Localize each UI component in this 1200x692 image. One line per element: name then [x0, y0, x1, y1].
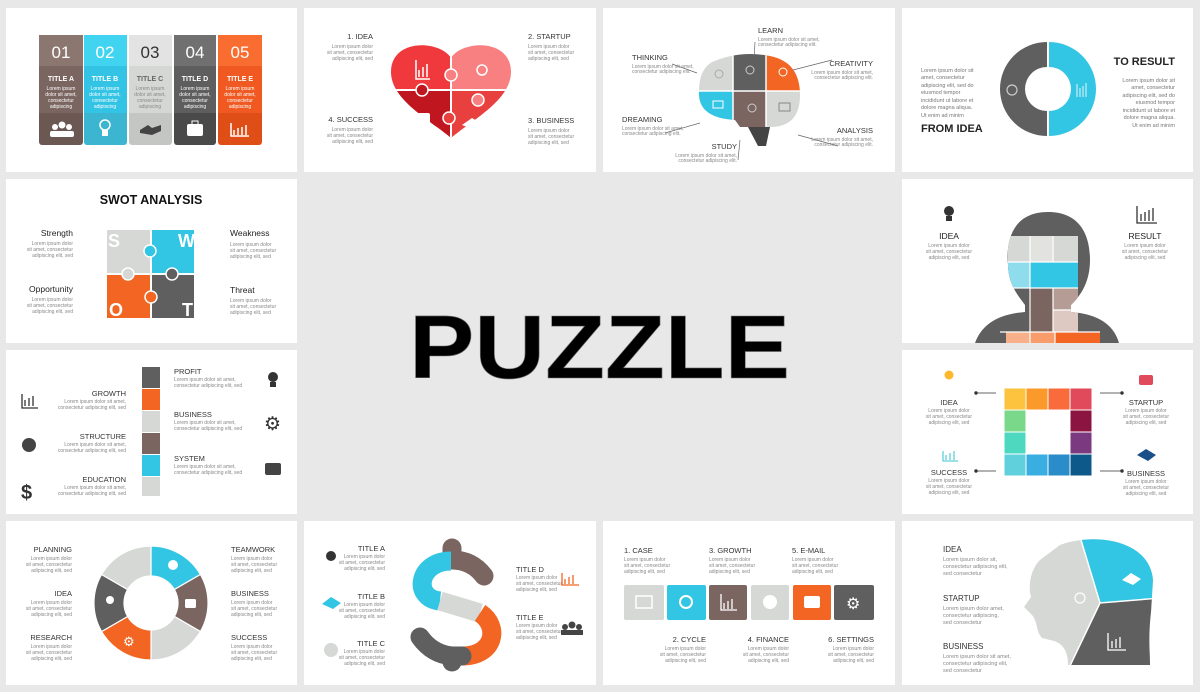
labels: left: TITLE C	[357, 639, 386, 648]
labels: sed consectetur	[943, 571, 982, 577]
label: 4. SUCCESS: sit amet, consectetur	[327, 133, 373, 139]
label: SUCCESS: sit amet, consectetur	[926, 484, 972, 490]
labels: left: adipiscing elit, sed	[31, 612, 72, 618]
column 01: TITLE A	[48, 76, 74, 83]
label: 3. BUSINESS: sit amet, consectetur	[528, 134, 574, 140]
label: Strength	[27, 228, 73, 259]
labels: sed consectetur	[943, 668, 982, 674]
label: SYSTEM: SYSTEM	[174, 454, 205, 463]
panel: SWOT analysis: O	[109, 300, 123, 320]
arrows	[975, 392, 1123, 472]
label: IDEA: sit amet, consectetur	[926, 249, 972, 255]
icons: left	[21, 394, 38, 504]
labels: top: adipiscing elit, sed	[709, 569, 750, 575]
labels: right: SUCCESS	[231, 633, 267, 642]
label: 4. SUCCESS: adipiscing elit, sed	[332, 139, 373, 145]
label: 2. STARTUP: sit amet, consectetur	[528, 50, 574, 56]
column 05: Lorem ipsum	[226, 86, 254, 92]
text block: left: eiusmod tempor	[921, 90, 961, 96]
column 01: consectetur	[48, 98, 74, 104]
column 01: Lorem ipsum	[47, 86, 75, 92]
label: THINKING: THINKING	[632, 53, 668, 62]
column 02	[84, 35, 127, 145]
labels: left: sit amet, consectetur	[339, 560, 385, 566]
label: BUSINESS: BUSINESS	[1127, 469, 1165, 478]
title: PUZZLE: PUZZLE	[409, 298, 790, 398]
label: 3. BUSINESS: Lorem ipsum dolor	[528, 128, 570, 134]
label: Threat	[230, 285, 276, 316]
label: 1. IDEA: sit amet, consectetur	[327, 50, 373, 56]
label: STARTUP: STARTUP	[1129, 398, 1163, 407]
label: SUCCESS: SUCCESS	[931, 468, 967, 477]
labels: left: Lorem ipsum dolor	[31, 644, 72, 650]
label: STUDY: STUDY	[712, 142, 737, 151]
label: SUCCESS: Lorem ipsum dolor	[928, 478, 970, 484]
icon: bar chart	[1137, 206, 1157, 223]
label: Strength: Lorem ipsum dolor	[32, 241, 73, 247]
column 01: adipiscing	[50, 104, 72, 110]
labels: top: sit amet, consectetur	[709, 563, 755, 569]
labels: left: Lorem ipsum dolor	[344, 602, 385, 608]
labels: top: sit amet, consectetur	[624, 563, 670, 569]
labels: left	[26, 545, 72, 662]
labels: right: adipiscing elit, sed	[516, 635, 557, 641]
label: CREATIVITY: CREATIVITY	[829, 59, 873, 68]
column 05: adipiscing	[229, 104, 251, 110]
label: IDEA: Lorem ipsum dolor	[928, 408, 970, 414]
text block: left: amet, consectetur	[921, 75, 965, 81]
label: PROFIT	[174, 367, 242, 389]
labels: top: adipiscing elit, sed	[624, 569, 665, 575]
labels: left: sit amet, consectetur	[26, 650, 72, 656]
column 05: TITLE E	[227, 76, 253, 83]
panel: horizontal puzzle strip	[603, 521, 895, 685]
labels: right: sit amet, consectetur	[516, 581, 562, 587]
labels: consectetur adipiscing,	[943, 613, 999, 619]
label: 1. IDEA: Lorem ipsum dolor	[332, 44, 373, 50]
labels: left	[339, 544, 386, 667]
label: 3. BUSINESS: 3. BUSINESS	[528, 116, 574, 125]
labels: left: sit amet, consectetur	[26, 562, 72, 568]
labels	[943, 545, 1011, 674]
heading: FROM IDEA: FROM IDEA	[921, 123, 983, 135]
label: STRUCTURE: Lorem ipsum dolor sit amet,	[64, 442, 126, 448]
labels: STARTUP	[943, 594, 980, 603]
label: BUSINESS: BUSINESS	[174, 410, 212, 419]
label: CREATIVITY: consectetur adipiscing elit.	[814, 75, 873, 81]
labels: left: TITLE A	[358, 544, 385, 553]
label: 3. BUSINESS	[528, 116, 574, 146]
labels: bottom: sit amet, consectetur	[828, 652, 874, 658]
label: RESULT	[1122, 231, 1168, 261]
text block: right: dolore magna aliqua.	[1124, 115, 1175, 121]
label: SUCCESS	[926, 451, 972, 496]
labels: top: 5. E-MAIL	[792, 546, 825, 555]
label: Weakness	[230, 228, 276, 260]
labels: right: Lorem ipsum dolor	[231, 600, 273, 606]
labels: top: Lorem ipsum dolor	[792, 557, 834, 563]
label: PROFIT: PROFIT	[174, 367, 202, 376]
labels: Lorem ipsum dolor sit amet,	[943, 654, 1011, 660]
labels: top: Lorem ipsum dolor	[624, 557, 666, 563]
column 05: consectetur	[227, 98, 253, 104]
label: 4. SUCCESS: Lorem ipsum dolor	[332, 127, 373, 133]
labels: left: adipiscing elit, sed	[344, 614, 385, 620]
labels: bottom	[660, 635, 874, 664]
label: Opportunity: Lorem ipsum dolor	[32, 297, 73, 303]
label: ANALYSIS: consectetur adipiscing elit.	[814, 142, 873, 148]
label: GROWTH: Lorem ipsum dolor sit amet,	[64, 399, 126, 405]
labels: top: adipiscing elit, sed	[792, 569, 833, 575]
labels: bottom: adipiscing elit, sed	[833, 658, 874, 664]
label: 1. IDEA	[327, 32, 373, 62]
text block: right: eiusmod tempor	[1136, 100, 1175, 106]
labels: bottom: adipiscing elit, sed	[665, 658, 706, 664]
column 02: TITLE B	[92, 76, 118, 83]
panel: head profile puzzle	[902, 521, 1193, 685]
column 04: TITLE D	[182, 76, 208, 83]
labels: left: TITLE B	[357, 592, 385, 601]
labels: sed consectetur	[943, 620, 982, 626]
label: SUCCESS: adipiscing elit, sed	[929, 490, 970, 496]
label: 1. IDEA: adipiscing elit, sed	[332, 56, 373, 62]
labels: left: sit amet, consectetur	[339, 655, 385, 661]
labels: bottom: sit amet, consectetur	[743, 652, 789, 658]
panel: SWOT analysis: S	[108, 231, 120, 251]
panel: circular 6-piece puzzle: ⚙	[123, 634, 135, 649]
label: STRUCTURE	[58, 432, 126, 454]
labels: right: Lorem ipsum dolor	[231, 556, 273, 562]
label: 4. SUCCESS: 4. SUCCESS	[328, 115, 373, 124]
label: STRUCTURE: STRUCTURE	[80, 432, 126, 441]
label: BUSINESS: Lorem ipsum dolor	[1125, 479, 1167, 485]
text block: left	[921, 68, 974, 119]
labels: bottom: 4. FINANCE	[748, 635, 789, 644]
labels: right: TEAMWORK	[231, 545, 275, 554]
icons	[322, 551, 583, 657]
label: IDEA: adipiscing elit, sed	[929, 420, 970, 426]
heading: TO RESULT: TO RESULT	[1114, 56, 1175, 68]
column 01	[39, 35, 83, 145]
column 03	[129, 35, 172, 145]
labels: IDEA	[943, 545, 962, 554]
label: Strength: Strength	[41, 228, 73, 238]
label: Strength: adipiscing elit, sed	[32, 253, 73, 259]
labels: left: sit amet, consectetur	[26, 606, 72, 612]
labels: top: sit amet, consectetur	[792, 563, 838, 569]
label: Opportunity	[27, 284, 74, 315]
label: LEARN: consectetur adipiscing elit.	[758, 42, 817, 48]
column 01: dolor sit amet,	[45, 92, 77, 98]
labels: left: IDEA	[54, 589, 72, 598]
column 04: 04	[186, 43, 204, 62]
label: Opportunity: Opportunity	[29, 284, 74, 294]
label: RESULT: adipiscing elit, sed	[1125, 255, 1166, 261]
labels: BUSINESS	[943, 642, 983, 651]
labels: right: TITLE D	[516, 565, 545, 574]
label: DREAMING: consectetur adipiscing elit.	[622, 131, 681, 137]
column 03: 03	[141, 43, 159, 62]
label: Threat: Threat	[230, 285, 255, 295]
label: BUSINESS: Lorem ipsum dolor sit amet,	[174, 420, 236, 426]
labels: left: PLANNING	[34, 545, 72, 554]
icon: lightbulb	[944, 206, 954, 221]
label: LEARN	[758, 26, 820, 48]
label: THINKING	[632, 53, 694, 75]
label: BUSINESS: consectetur adipiscing elit, sed	[174, 426, 242, 432]
column 04: consectetur	[182, 98, 208, 104]
labels: top: Lorem ipsum dolor	[709, 557, 751, 563]
icons: right	[264, 372, 281, 475]
label: IDEA	[926, 231, 972, 261]
panel: square puzzle ring	[902, 350, 1193, 514]
label: IDEA: IDEA	[940, 398, 958, 407]
label: DREAMING	[622, 115, 684, 137]
labels: bottom: Lorem ipsum dolor	[748, 646, 789, 652]
panel: horizontal puzzle strip: ⚙	[846, 596, 860, 613]
label: EDUCATION: consectetur adipiscing elit, sed	[58, 491, 126, 497]
icons: right: ⚙	[264, 414, 281, 435]
panel: heart puzzle	[304, 8, 596, 172]
label: BUSINESS: adipiscing elit, sed	[1126, 491, 1167, 497]
icons: left: $	[21, 482, 32, 504]
labels: left: Lorem ipsum dolor	[344, 554, 385, 560]
label: ANALYSIS: Lorem ipsum dolor sit amet,	[811, 137, 873, 143]
label: STARTUP: adipiscing elit, sed	[1126, 420, 1167, 426]
labels: right: sit amet, consectetur	[231, 606, 277, 612]
labels: left: adipiscing elit, sed	[344, 661, 385, 667]
label: PROFIT: Lorem ipsum dolor sit amet,	[174, 377, 236, 383]
labels: left: RESEARCH	[30, 633, 72, 642]
label: Threat: adipiscing elit, sed	[230, 310, 271, 316]
column 03: adipiscing	[139, 104, 161, 110]
panel: SWOT analysis: W	[178, 231, 195, 251]
label: IDEA: IDEA	[939, 231, 959, 241]
label: RESULT: Lorem ipsum dolor	[1124, 243, 1166, 249]
label: EDUCATION: Lorem ipsum dolor sit amet,	[64, 485, 126, 491]
column 05	[218, 35, 262, 145]
label: IDEA: sit amet, consectetur	[926, 414, 972, 420]
label: DREAMING: DREAMING	[622, 115, 663, 124]
label: IDEA: Lorem ipsum dolor	[928, 243, 970, 249]
labels: right: adipiscing elit, sed	[231, 568, 272, 574]
label: LEARN: Lorem ipsum dolor sit amet,	[758, 37, 820, 43]
label: 1. IDEA: 1. IDEA	[347, 32, 373, 41]
panel: circular 6-piece puzzle	[6, 521, 297, 685]
label: EDUCATION: EDUCATION	[82, 475, 126, 484]
label: SYSTEM	[174, 454, 242, 476]
label: 2. STARTUP: Lorem ipsum dolor	[528, 44, 570, 50]
text block: right: amet, consectetur	[1131, 85, 1175, 91]
label: STARTUP: sit amet, consectetur	[1123, 414, 1169, 420]
label: BUSINESS: sit amet, consectetur	[1123, 485, 1169, 491]
label: DREAMING: Lorem ipsum dolor sit amet,	[622, 126, 684, 132]
label: Weakness: Lorem ipsum dolor	[230, 242, 272, 248]
column 03: Lorem ipsum	[136, 86, 164, 92]
label: CREATIVITY	[811, 59, 873, 81]
label: 2. STARTUP: adipiscing elit, sed	[528, 56, 569, 62]
label: STRUCTURE: consectetur adipiscing elit, sed	[58, 448, 126, 454]
panel: from idea to result ring	[902, 8, 1193, 172]
labels: top: 1. CASE	[624, 546, 653, 555]
column 04	[174, 35, 216, 145]
label: 2. STARTUP: 2. STARTUP	[528, 32, 571, 41]
labels: right: BUSINESS	[231, 589, 269, 598]
label: Weakness: adipiscing elit, sed	[230, 254, 271, 260]
column 04: adipiscing	[184, 104, 206, 110]
label: 4. SUCCESS	[327, 115, 373, 145]
label: Opportunity: adipiscing elit, sed	[32, 309, 73, 315]
column 03: consectetur	[137, 98, 163, 104]
labels: left: adipiscing elit, sed	[344, 566, 385, 572]
labels: left: Lorem ipsum dolor	[31, 600, 72, 606]
panel: head puzzle	[902, 179, 1193, 345]
label: GROWTH	[58, 389, 126, 411]
labels: right: adipiscing elit, sed	[231, 656, 272, 662]
label: BUSINESS	[174, 410, 242, 432]
label: Strength: sit amet, consectetur	[27, 247, 73, 253]
labels: consectetur adipiscing elit,	[943, 564, 1008, 570]
labels: bottom: Lorem ipsum dolor	[833, 646, 874, 652]
text block: left: adipiscing elit, sed do	[921, 83, 974, 89]
panel: SWOT analysis	[6, 179, 297, 343]
label: Weakness: sit amet, consectetur	[230, 248, 276, 254]
labels: right: sit amet, consectetur	[231, 650, 277, 656]
text block: right	[1122, 78, 1175, 129]
column 02: dolor sit amet,	[89, 92, 121, 98]
label: PROFIT: consectetur adipiscing elit, sed	[174, 383, 242, 389]
labels: bottom: sit amet, consectetur	[660, 652, 706, 658]
labels: right: sit amet, consectetur	[231, 562, 277, 568]
label: ANALYSIS: ANALYSIS	[837, 126, 873, 135]
text block: left: Lorem ipsum dolor sit	[921, 68, 974, 74]
labels: right: adipiscing elit, sed	[231, 612, 272, 618]
labels: bottom: 2. CYCLE	[673, 635, 706, 644]
column 04: Lorem ipsum	[181, 86, 209, 92]
column 02: consectetur	[92, 98, 118, 104]
text block: right: adipiscing elit, sed do	[1122, 93, 1175, 99]
label: STARTUP	[1123, 375, 1169, 426]
label: STUDY	[675, 142, 737, 164]
labels: left: adipiscing elit, sed	[31, 568, 72, 574]
labels: top	[624, 546, 838, 575]
column 01: 01	[52, 43, 70, 62]
column 03: dolor sit amet,	[134, 92, 166, 98]
label: THINKING: Lorem ipsum dolor sit amet,	[632, 64, 694, 70]
labels: top: 3. GROWTH	[709, 546, 752, 555]
labels: left: Lorem ipsum dolor	[31, 556, 72, 562]
labels: bottom: 6. SETTINGS	[828, 635, 874, 644]
label: GROWTH: consectetur adipiscing elit, sed	[58, 405, 126, 411]
label: LEARN: LEARN	[758, 26, 783, 35]
label: SYSTEM: consectetur adipiscing elit, sed	[174, 470, 242, 476]
label: 2. STARTUP	[528, 32, 574, 62]
labels: right: Lorem ipsum dolor	[516, 575, 558, 581]
labels: right: sit amet, consectetur	[516, 629, 562, 635]
panel: brain puzzle	[603, 8, 895, 172]
labels: right: TITLE E	[516, 613, 544, 622]
labels: bottom: adipiscing elit, sed	[748, 658, 789, 664]
text block: right: Ut enim ad minim	[1132, 123, 1175, 129]
label: ANALYSIS	[811, 126, 873, 148]
label: STARTUP: Lorem ipsum dolor	[1125, 408, 1167, 414]
label: Opportunity: sit amet, consectetur	[27, 303, 73, 309]
label: Threat: sit amet, consectetur	[230, 304, 276, 310]
column 02: 02	[96, 43, 114, 62]
panel: SWOT analysis: T	[182, 300, 193, 320]
labels: right	[516, 565, 562, 641]
labels: left: sit amet, consectetur	[339, 608, 385, 614]
column 04: dolor sit amet,	[179, 92, 211, 98]
label: EDUCATION	[58, 475, 126, 497]
text block: right: Lorem ipsum dolor sit	[1122, 78, 1175, 84]
label: 3. BUSINESS: adipiscing elit, sed	[528, 140, 569, 146]
panel: dollar puzzle	[304, 521, 596, 685]
column 05: 05	[231, 43, 249, 62]
labels: right	[231, 545, 277, 662]
label: STUDY: consectetur adipiscing elit.	[678, 158, 737, 164]
label: THINKING: consectetur adipiscing elit.	[632, 69, 691, 75]
labels: consectetur adipiscing elit,	[943, 661, 1008, 667]
labels: left: Lorem ipsum dolor	[344, 649, 385, 655]
label: IDEA	[926, 370, 972, 426]
text block: left: dolore magna aliqua.	[921, 105, 973, 111]
labels: left: adipiscing elit, sed	[31, 656, 72, 662]
text block: left: incididunt ut labore et	[921, 98, 974, 104]
label: BUSINESS	[1123, 449, 1169, 497]
title: SWOT ANALYSIS: SWOT ANALYSIS	[100, 193, 202, 207]
label: RESULT: RESULT	[1129, 231, 1161, 241]
text block: right: incididunt ut labore et	[1123, 108, 1175, 114]
label: IDEA: adipiscing elit, sed	[929, 255, 970, 261]
label: GROWTH: GROWTH	[92, 389, 126, 398]
label: RESULT: sit amet, consectetur	[1122, 249, 1168, 255]
label: SYSTEM: Lorem ipsum dolor sit amet,	[174, 464, 236, 470]
column 02: Lorem ipsum	[91, 86, 119, 92]
panel: numbered columns	[6, 8, 297, 172]
labels: Lorem ipsum dolor amet,	[943, 606, 1004, 612]
labels: right: adipiscing elit, sed	[516, 587, 557, 593]
column 05: dolor sit amet,	[224, 92, 256, 98]
panel: vertical puzzle column	[6, 350, 297, 514]
label: CREATIVITY: Lorem ipsum dolor sit amet,	[811, 70, 873, 76]
label: Threat: Lorem ipsum dolor	[230, 298, 272, 304]
labels: bottom: Lorem ipsum dolor	[665, 646, 706, 652]
label: Weakness: Weakness	[230, 228, 270, 238]
labels: right: Lorem ipsum dolor	[516, 623, 558, 629]
text block: left: Ut enim ad minim	[921, 113, 964, 119]
column 02: adipiscing	[94, 104, 116, 110]
label: STUDY: Lorem ipsum dolor sit amet,	[675, 153, 737, 159]
column 03: TITLE C	[137, 76, 163, 83]
labels: Lorem ipsum dolor sit,	[943, 557, 998, 563]
labels: right: Lorem ipsum dolor	[231, 644, 273, 650]
